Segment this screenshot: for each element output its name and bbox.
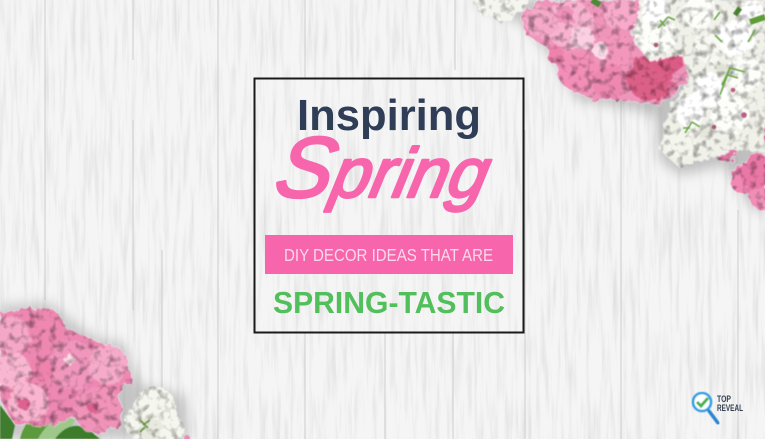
flower shadow (470, 0, 765, 215)
title frame (254, 78, 524, 332)
pink blossoms (522, 0, 765, 209)
pink blossoms (0, 307, 132, 434)
green stems and pink buds (592, 0, 765, 133)
text: SPRING-TASTIC: SPRING-TASTIC (273, 285, 505, 320)
icon: magnifying glass with check (693, 393, 718, 423)
white blossom top edge (475, 0, 528, 22)
white blossom (125, 387, 184, 439)
heading: Inspiring: Inspiring (297, 91, 481, 140)
logo text: TOP (717, 394, 731, 405)
heading: Spring: Spring (268, 120, 500, 216)
green leaves (0, 402, 190, 439)
flowers: top right corner (470, 0, 765, 215)
logo: Top Reveal: REVEAL (717, 403, 743, 414)
logo: Top Reveal (693, 393, 743, 423)
banner: DIY decor ideas (265, 235, 513, 274)
flowers: bottom left corner (0, 303, 190, 439)
flower shadow (0, 303, 190, 439)
banner: DIY decor ideas: DIY DECOR IDEAS THAT ARE (284, 245, 493, 265)
white lilac clusters (632, 0, 765, 168)
